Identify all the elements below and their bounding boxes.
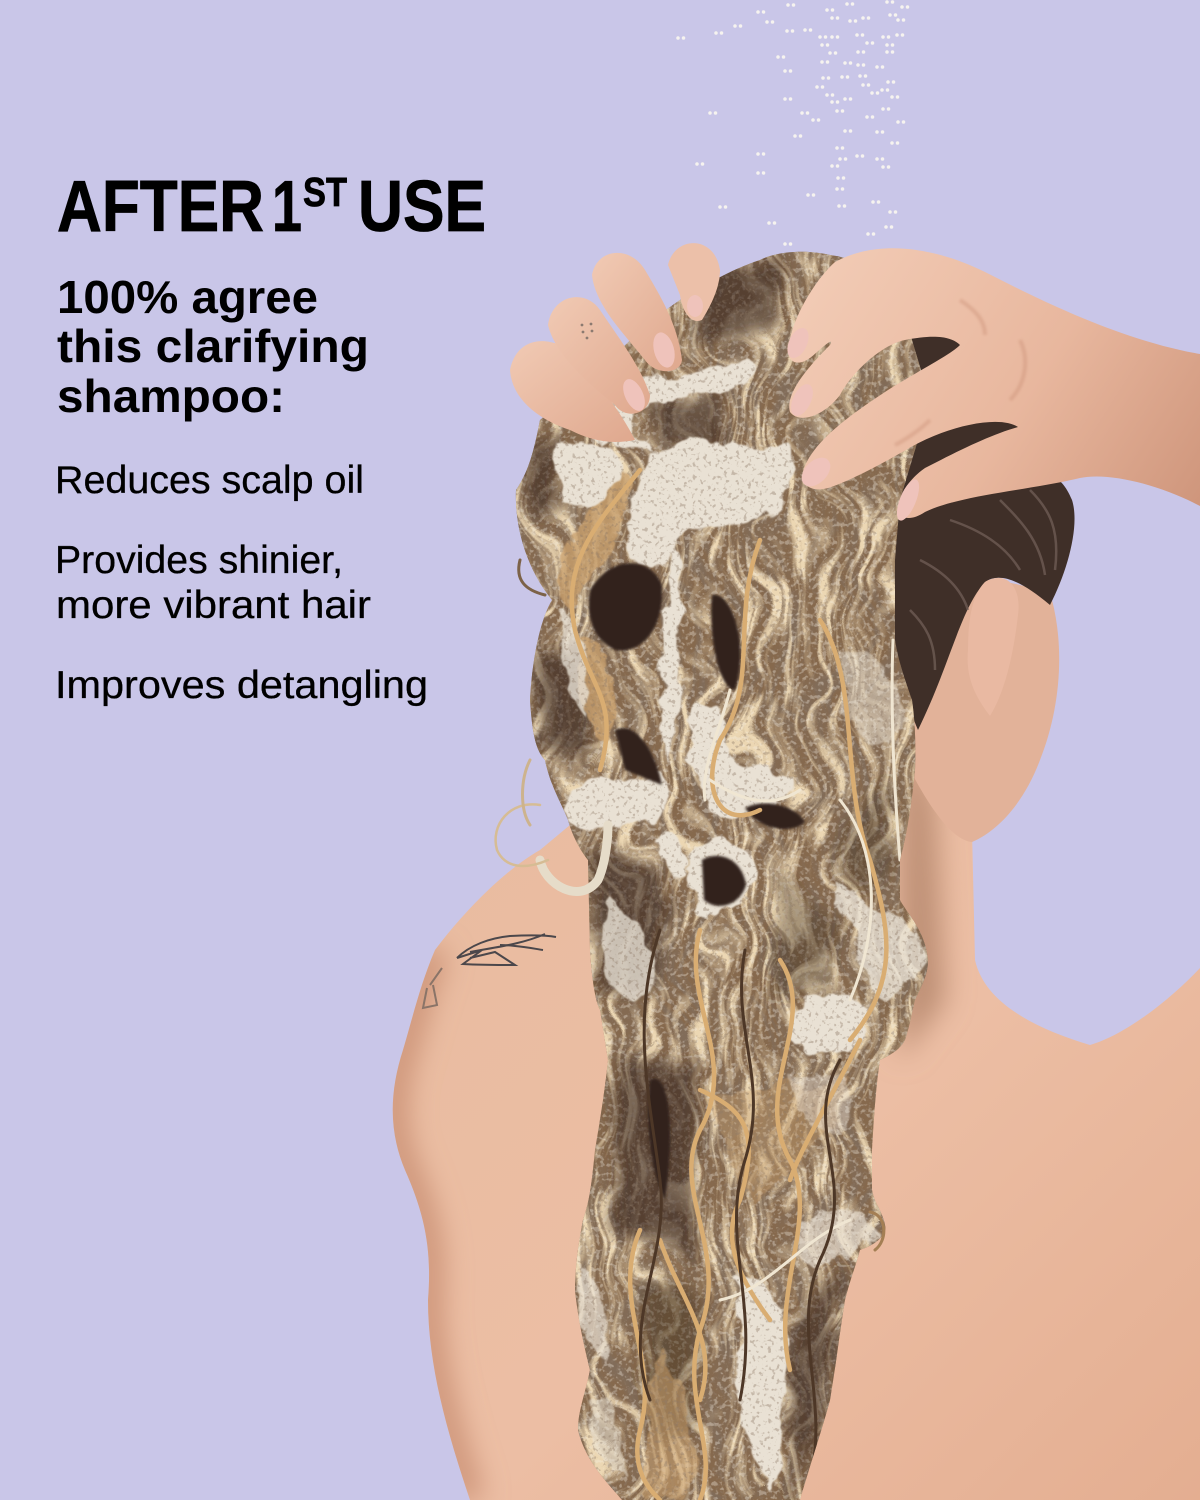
ear xyxy=(968,578,1019,716)
subheading: shampoo: xyxy=(57,370,285,422)
benefit: scalp oil: Reduces scalp oil xyxy=(55,459,364,502)
wavy hair strands xyxy=(572,470,900,1500)
left hand fingernails xyxy=(619,295,703,414)
dark specks over foam xyxy=(516,252,926,1500)
title: 1 xyxy=(272,167,302,247)
title: ST xyxy=(303,169,347,215)
golden hair clumps xyxy=(561,471,850,1500)
head skin with cheek xyxy=(900,579,1059,842)
finger tattoo dots xyxy=(581,323,593,339)
benefit: shine: Provides shinier, xyxy=(55,539,343,582)
benefit: shine xyxy=(55,539,371,627)
dark hair shadows xyxy=(525,262,895,1500)
dark gaps between hair clumps xyxy=(589,563,805,1200)
left hand with fingers xyxy=(510,243,720,442)
right hand and forearm xyxy=(783,248,1200,523)
shower droplets xyxy=(678,2,909,244)
back of head dark hair xyxy=(840,290,1075,730)
loose foamy curls at left of hair xyxy=(496,560,884,1250)
benefit: detangling: Improves detangling xyxy=(55,664,428,707)
foam patches xyxy=(556,361,925,1490)
back, shoulders and neck xyxy=(393,700,1200,1500)
subheading: 100% agree xyxy=(57,271,318,323)
tattoo on shoulder xyxy=(423,934,556,1008)
long foamy hair xyxy=(516,252,928,1500)
title: USE xyxy=(358,167,486,247)
title: AFTER xyxy=(57,167,264,247)
benefit: shine: more vibrant hair xyxy=(56,584,371,627)
title xyxy=(57,167,486,247)
subheading: this clarifying xyxy=(57,320,369,372)
knuckle shadows xyxy=(895,300,1025,445)
subheading xyxy=(57,271,369,422)
right hand fingernails xyxy=(783,325,924,523)
